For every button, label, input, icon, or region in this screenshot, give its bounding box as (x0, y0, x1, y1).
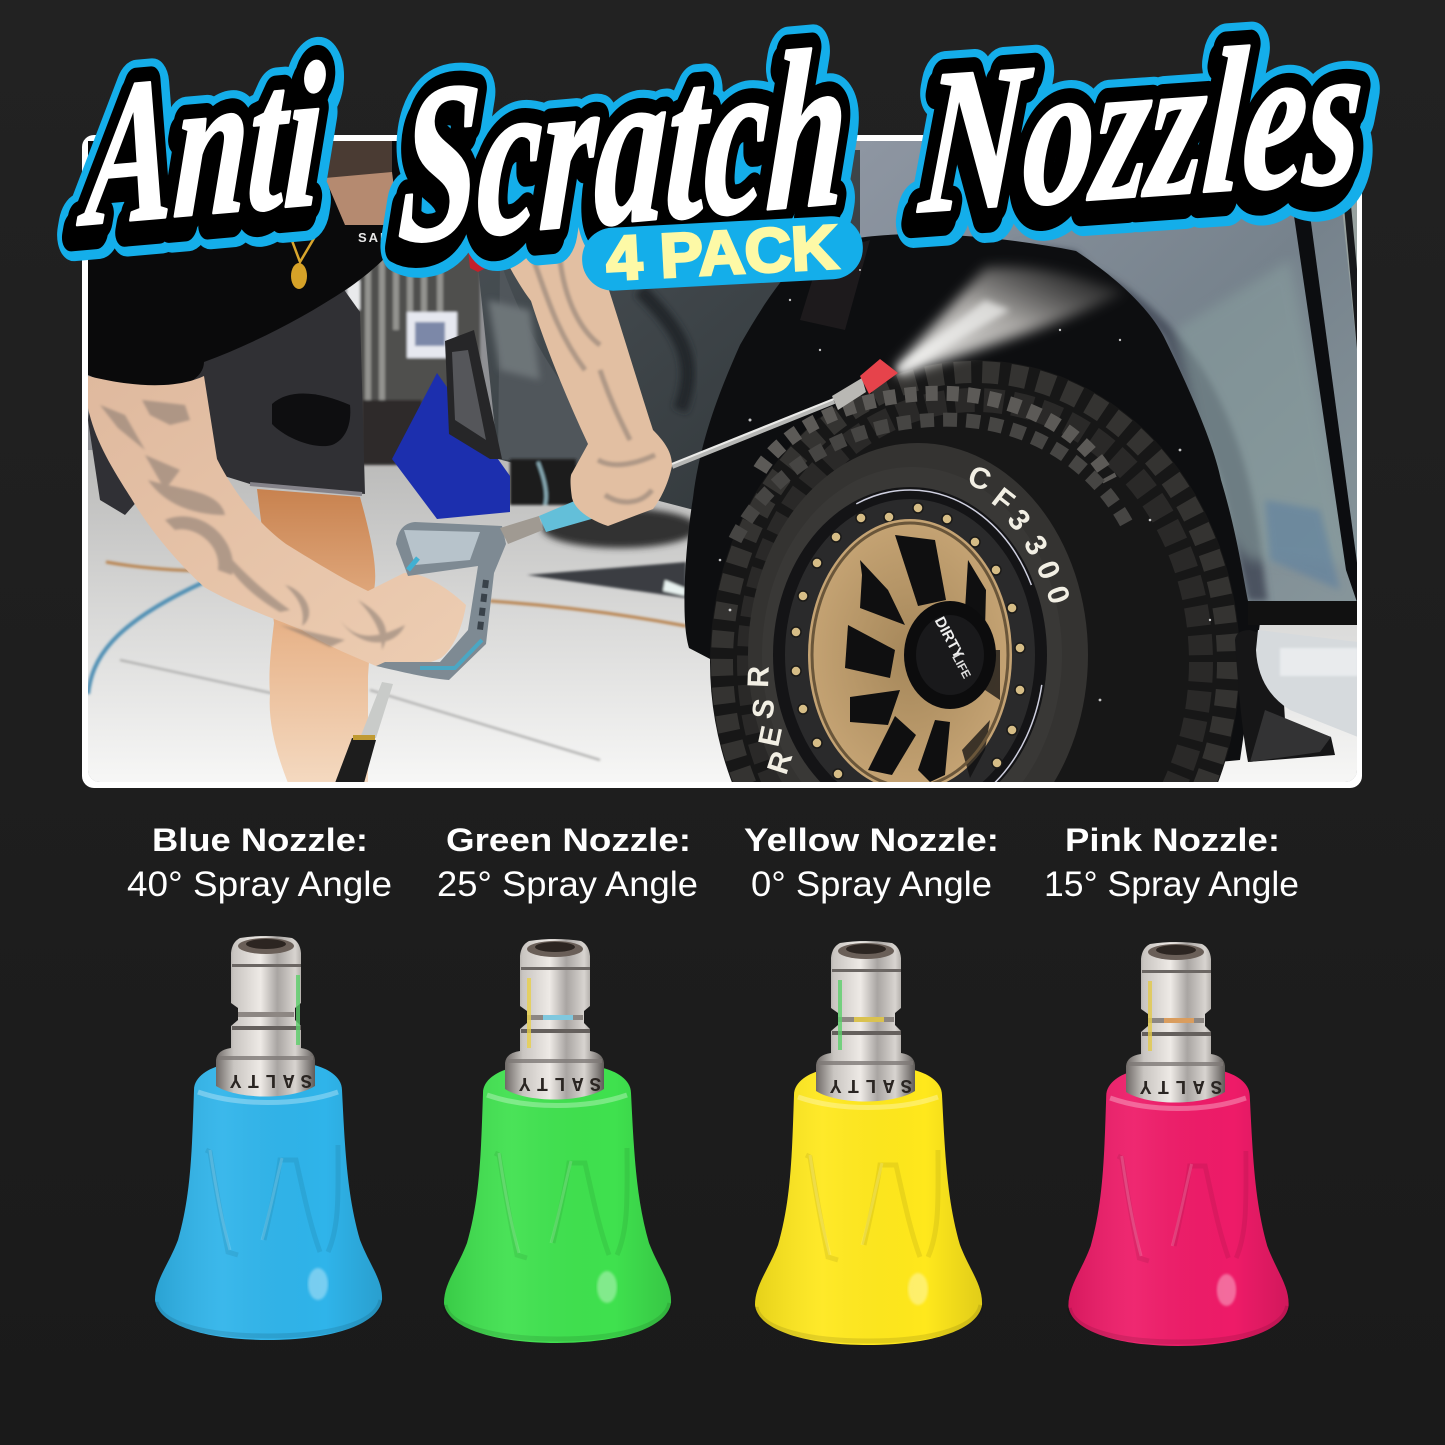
man: leg (257, 489, 375, 783)
man: head and neck (325, 141, 395, 225)
garage background (347, 230, 480, 465)
title word: Anti: Anti (74, 25, 328, 276)
shirt logo: SALT (358, 230, 399, 245)
water spray (719, 267, 1211, 701)
label: Blue Nozzle: 40° Spray Angle (127, 865, 392, 904)
wheel bolts (791, 503, 1025, 779)
tyre sidewall lettering RSER (747, 667, 792, 774)
nozzle: pink (1068, 942, 1289, 1346)
wheel arch (684, 234, 1260, 762)
title word: Anti: Anti (70, 29, 324, 280)
floor hoses and mat (88, 562, 686, 760)
beadlock wheel (773, 487, 1047, 782)
tyre (710, 360, 1238, 782)
panel: hero photo of pressure washing a truck wheel (82, 135, 1362, 788)
running board and mudflap (1235, 630, 1358, 762)
nozzle: blue (155, 936, 382, 1340)
title word: Anti: Anti (74, 19, 328, 270)
label: Pink Nozzle (1044, 822, 1299, 904)
label: Green Nozzle (437, 822, 698, 904)
title word: Anti (70, 19, 328, 280)
window pillar (1294, 217, 1357, 601)
tyre sidewall lettering CF3300 (970, 467, 1069, 602)
label: Yellow Nozzle: Yellow Nozzle: (744, 822, 999, 858)
man: shorts (88, 270, 365, 515)
nozzle: pink: SALTY (1139, 1075, 1222, 1097)
truck underside (1260, 623, 1357, 625)
tyre sidewall lettering CF3300: C (964, 460, 995, 498)
wheel hub with DIRTY logo: DIRTY (931, 614, 967, 662)
tyre sidewall lettering CF3300: 0 (1030, 556, 1066, 584)
title: Anti Scratch Nozzles (70, 0, 1370, 301)
dark wheel behind (510, 459, 576, 505)
label: Pink Nozzle: Pink Nozzle: (1065, 822, 1280, 858)
tyre sidewall lettering RSER: R (761, 747, 799, 778)
title word: Scratch (390, 1, 854, 301)
man: black t-shirt (88, 141, 400, 386)
tyre sidewall lettering CF3300: 3 (1001, 503, 1037, 537)
wheel hub with DIRTY logo (904, 601, 996, 709)
nozzle: green: SALTY (518, 1072, 601, 1094)
tattooed arm holding the gun (88, 376, 466, 668)
label: Green Nozzle: Green Nozzle: (446, 822, 691, 858)
quick-connect hose fitting (335, 682, 393, 783)
garage floor (88, 450, 1358, 783)
label: Pink Nozzle: 15° Spray Angle (1044, 865, 1299, 904)
tyre sidewall lettering RSER: E (753, 723, 789, 749)
nozzle: yellow (755, 941, 982, 1345)
stainless wand and red tip (672, 359, 898, 466)
gold chain and pendant (291, 238, 316, 289)
gold rim with spokes (808, 519, 1012, 791)
label: Blue Nozzle (127, 822, 392, 904)
nozzle: yellow: SALTY (829, 1074, 912, 1096)
label: Blue Nozzle: Blue Nozzle: (152, 822, 368, 858)
badge: 4 PACK: 4 PACK (604, 213, 840, 294)
tyre sidewall lettering CF3300: 0 (1039, 582, 1076, 608)
blue cloth (392, 373, 510, 519)
nozzle: blue: SALTY (229, 1069, 312, 1091)
tail light (445, 330, 502, 459)
tyre sidewall lettering RSER: R (742, 665, 776, 688)
truck rear panel (478, 150, 860, 510)
nozzle: green (444, 939, 671, 1343)
wheel hub with DIRTY logo: LIFE (949, 651, 974, 681)
title word: Anti: Anti (74, 19, 328, 270)
tyre sidewall lettering CF3300: 3 (1017, 530, 1054, 561)
tyre sidewall lettering CF3300: F (986, 482, 1020, 519)
pressure washer gun (376, 491, 602, 680)
truck fender and body right (860, 141, 1358, 605)
label: Green Nozzle: 25° Spray Angle (437, 865, 698, 904)
label: Yellow Nozzle: 0° Spray Angle (751, 865, 992, 904)
tyre sidewall lettering RSER: S (746, 697, 782, 721)
right arm and hand (510, 226, 672, 526)
label: Yellow Nozzle (744, 822, 999, 904)
